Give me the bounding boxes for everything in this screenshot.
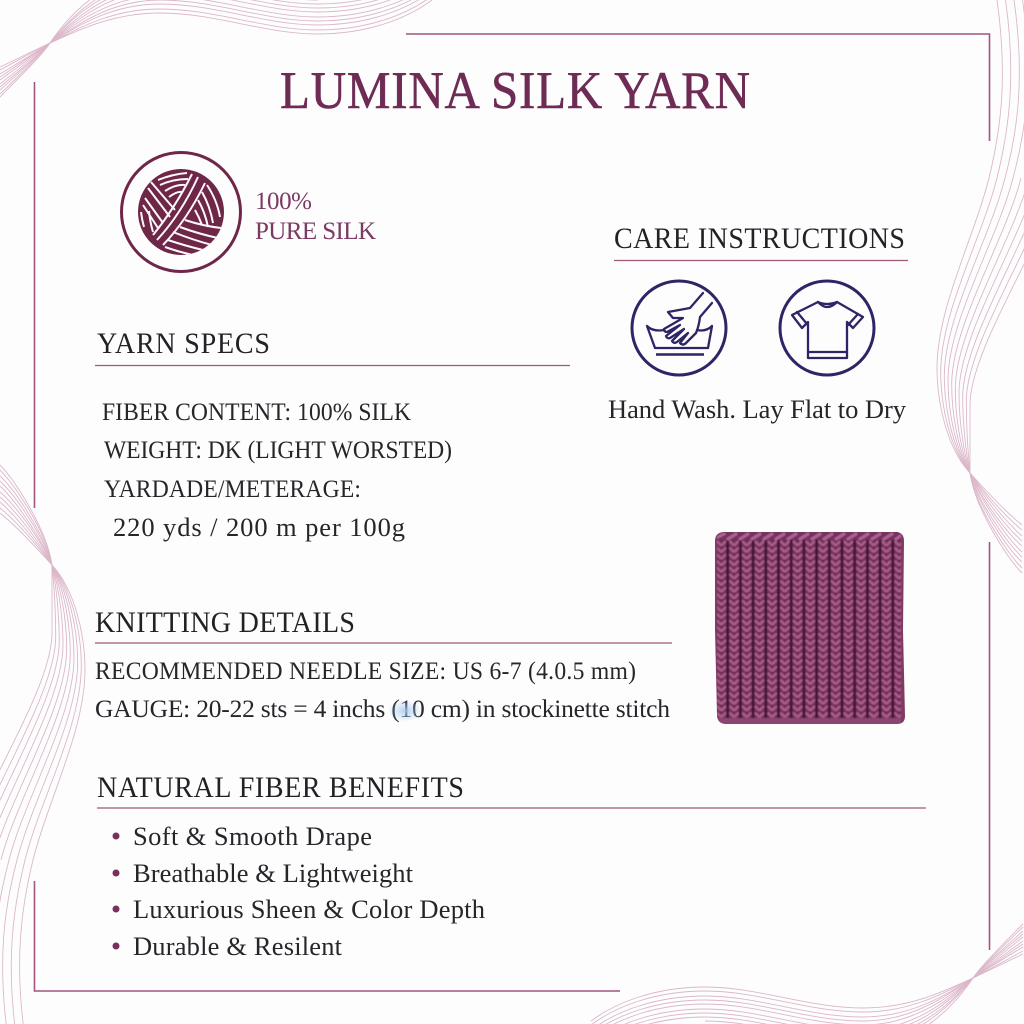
fiber badge text: PURE SILK [255, 218, 376, 245]
knit swatch [715, 532, 905, 724]
benefits list [112, 821, 485, 961]
yarn specs text [102, 398, 452, 542]
knitting details text [95, 657, 670, 723]
benefits list: Durable & Resilent [133, 931, 343, 961]
decorative wave: top left [0, 0, 432, 97]
corner frame: bottom left [34, 881, 620, 991]
fiber badge text: 100% [255, 188, 312, 215]
decorative wave: bottom right [591, 924, 1023, 1024]
yarn specs text: 220 yds / 200 m per 100g [113, 512, 405, 542]
icon: hand wash [632, 281, 726, 375]
benefits list: Soft & Smooth Drape [133, 821, 372, 851]
heading: knitting details: KNITTING DETAILS [95, 606, 355, 639]
icon: t-shirt lay flat [780, 281, 874, 375]
yarn specs text: WEIGHT: DK (LIGHT WORSTED) [104, 436, 452, 464]
fiber badge text [255, 188, 376, 245]
title: LUMINA SILK YARN [280, 62, 750, 120]
corner frame: right lower [988, 542, 990, 950]
benefits list: Luxurious Sheen & Color Depth [133, 894, 485, 924]
decorative wave: right [937, 0, 1024, 573]
benefits list: Breathable & Lightweight [133, 858, 414, 888]
decorative wave: left [0, 465, 85, 1024]
yarn specs text: FIBER CONTENT: 100% SILK [102, 398, 411, 426]
heading: care instructions: CARE INSTRUCTIONS [614, 222, 905, 255]
smudge on gauge text [388, 700, 422, 722]
heading: yarn specs: YARN SPECS [97, 327, 270, 360]
yarn specs text: YARDADE/METERAGE: [104, 475, 361, 503]
knitting details text: RECOMMENDED NEEDLE SIZE: US 6-7 (4.0.5 mm) [95, 657, 636, 685]
knitting details text: GAUGE: 20-22 sts = 4 inchs (10 cm) in stockinette stitch [95, 694, 670, 723]
corner frame: top right [406, 34, 990, 141]
corner frame: left upper [34, 82, 36, 508]
icon: yarn ball badge [122, 152, 240, 272]
heading: natural fiber benefits: NATURAL FIBER BENEFITS [97, 771, 464, 804]
care caption: Hand Wash. Lay Flat to Dry [608, 394, 907, 424]
